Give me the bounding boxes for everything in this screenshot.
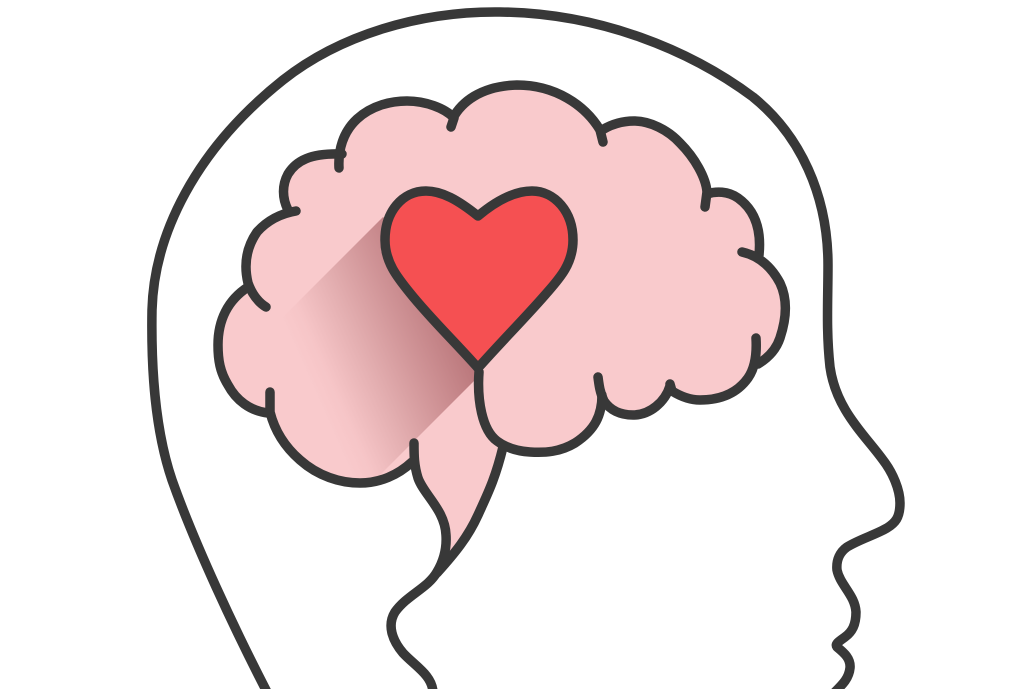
illustration: head with brain and heart — [147, 7, 905, 689]
brain fill — [218, 85, 785, 572]
brain outline with folds — [218, 85, 785, 689]
head outline — [152, 12, 900, 689]
heart — [385, 191, 573, 368]
heart long shadow — [301, 217, 474, 475]
